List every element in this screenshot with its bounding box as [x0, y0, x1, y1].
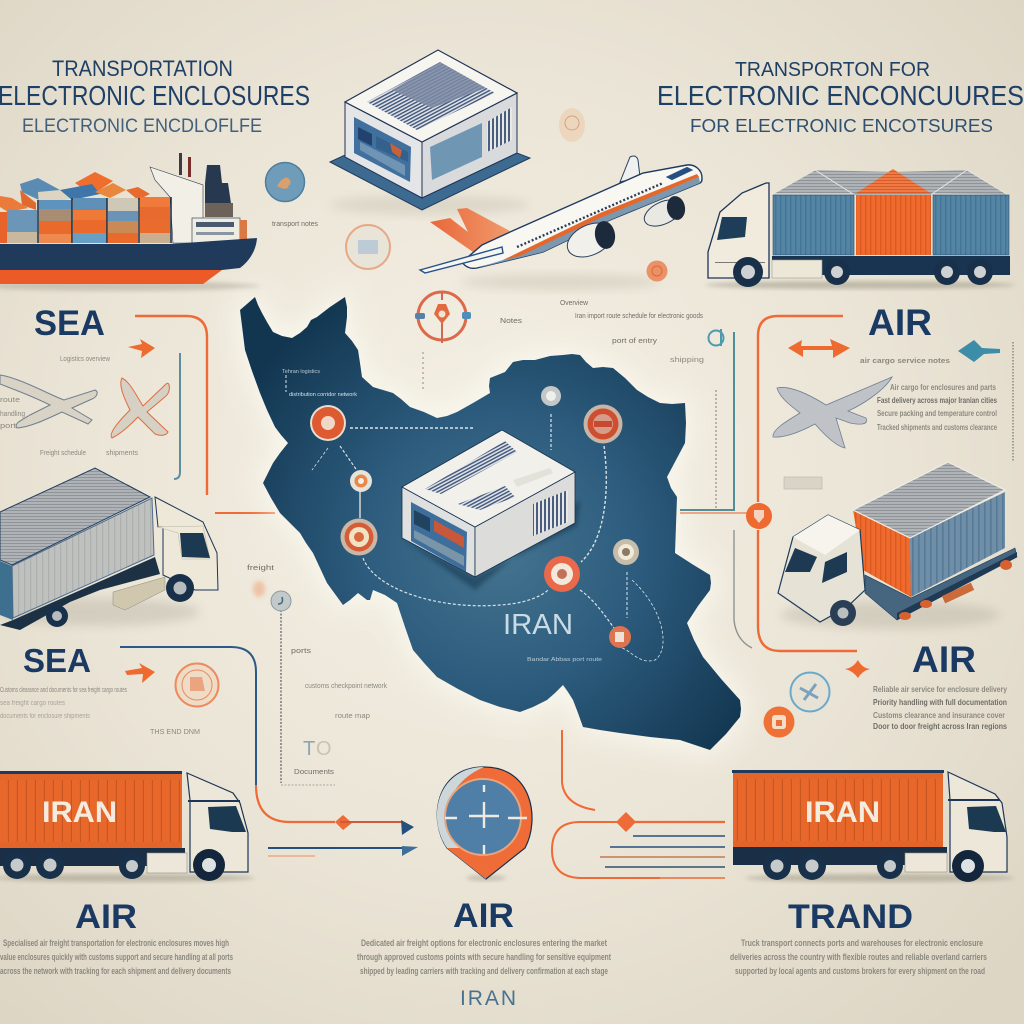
truck: left grey [0, 468, 218, 630]
wheel [763, 852, 791, 880]
Iran map [240, 297, 741, 750]
route lines right upper [680, 316, 1013, 651]
truck chassis [772, 256, 1010, 275]
plane tail fin [620, 156, 640, 182]
text block: centre [357, 938, 611, 976]
heading: air centre: AIR [453, 897, 514, 935]
trailer top [0, 468, 150, 565]
title block right: FOR ELECTRONIC ENCOTSURES [690, 116, 993, 136]
orange container [856, 195, 931, 255]
icon: faint building [784, 477, 822, 489]
text block: centre: Dedicated air freight options for electronic enclosures entering the market [361, 938, 607, 948]
box stripes [425, 441, 517, 494]
map shape [240, 297, 741, 750]
wheel [967, 259, 993, 285]
faint captions upper centre: Iran import route schedule for electronic goods [575, 313, 703, 320]
faint captions upper centre [500, 300, 704, 364]
dashed vertical faint [422, 352, 424, 392]
route lines centre right [552, 730, 725, 878]
heading: air upper right: AIR [868, 302, 932, 343]
faint captions upper centre: shipping [670, 357, 704, 364]
node [340, 518, 378, 556]
wheel [46, 605, 68, 627]
box top panel [367, 62, 495, 130]
cab [155, 497, 218, 590]
ship hull [0, 238, 257, 270]
wheel [952, 850, 984, 882]
icon: small grey pin [271, 591, 291, 611]
cab [778, 515, 865, 622]
text: air right lines [860, 358, 997, 432]
plane near wing [420, 247, 503, 273]
text: left faint: Customs clearance and documents for sea freight cargo routes [0, 687, 127, 694]
plane orange stabiliser [430, 208, 510, 252]
heading: sea 1: SEA [34, 304, 105, 343]
text block: bottom left: value enclosures quickly with customs support and secure handling at all ports [0, 952, 233, 962]
faint captions upper centre: port of entry [612, 338, 658, 345]
pin marker centre [437, 767, 532, 881]
truck cab [708, 183, 769, 278]
faint captions upper centre: Notes [500, 318, 523, 325]
wheel [934, 259, 960, 285]
faint caption top: transport notes [272, 221, 318, 228]
map labels small [282, 369, 602, 663]
container: IRAN [42, 796, 117, 829]
node [544, 556, 580, 592]
box screen [411, 502, 467, 572]
title block left: ELECTRONIC ENCDLOFLFE [22, 116, 262, 137]
text: air right lines: air cargo service notes [860, 358, 950, 365]
text: left faint 2 [0, 565, 387, 776]
text: left faint 2: O [316, 738, 332, 760]
icon: orange square [764, 706, 794, 738]
orange truck: bottom right [732, 770, 1015, 882]
blue container [773, 195, 854, 255]
trailer side [12, 498, 154, 618]
chassis [733, 847, 947, 865]
arrow: teal [958, 340, 1000, 362]
plane engine near [562, 216, 618, 264]
icon: blue ring [790, 672, 830, 712]
icon: small orange circle [646, 260, 668, 282]
text: left faint 2: route map [335, 713, 370, 720]
box left screen [354, 117, 411, 182]
icon: faint screen circle [346, 225, 390, 269]
truck: right isometric [778, 462, 1017, 629]
wheel [166, 574, 194, 602]
map labels small: distribution corridor network [289, 392, 357, 398]
ship superstructure [150, 153, 247, 243]
route: dashed network [286, 375, 663, 661]
truck tarp [113, 577, 165, 610]
wheel [830, 600, 856, 626]
wheel [798, 852, 826, 880]
wheel [3, 851, 31, 879]
truck: top right [705, 169, 1015, 289]
text: left upper faint lines: handling [0, 411, 25, 418]
heading: trand: TRAND [788, 898, 913, 936]
map label: IRAN: IRAN [503, 609, 573, 641]
icon: blue circle [266, 162, 304, 202]
text: left upper faint lines: Logistics overview [60, 356, 111, 363]
map labels small: Bandar Abbas port route [527, 657, 602, 663]
arrow: double orange [788, 339, 850, 358]
title block right: TRANSPORTON FOR [735, 59, 930, 81]
box stripes [458, 486, 515, 510]
title block left [0, 56, 310, 137]
icon: orange circle [176, 664, 218, 706]
blue container rear [933, 195, 1009, 255]
container [732, 770, 944, 847]
title block left: TRANSPORTATION [52, 56, 233, 81]
title block left: ELECTRONIC ENCLOSURES [0, 80, 310, 111]
node [310, 405, 346, 441]
text: left upper faint lines: route [0, 397, 20, 404]
wheel [733, 257, 763, 287]
trailer platform [865, 548, 1017, 620]
plane: x-shaped left [111, 378, 169, 438]
orange truck: bottom left [0, 771, 255, 882]
wheel [824, 259, 850, 285]
plane fuselage [462, 165, 702, 268]
airplane [420, 156, 702, 290]
truck underbody [0, 557, 160, 630]
truck roofs [773, 169, 1008, 195]
heading: air bottom left: AIR [75, 898, 137, 936]
faint captions upper centre: Overview [560, 300, 589, 307]
plane: grey right [773, 377, 892, 448]
heading: air lower right: AIR [912, 639, 976, 680]
box barcode [533, 490, 568, 536]
text: left faint 2: Documents [294, 769, 335, 776]
route lines left upper [128, 316, 275, 513]
box label [513, 468, 553, 487]
icon: orange marker on line [746, 503, 772, 529]
label: iran bottom: IRAN [460, 987, 516, 1010]
diamond [845, 660, 870, 678]
text: left upper faint lines: port [0, 423, 16, 430]
enclosure box top [330, 50, 530, 215]
text: left faint 2: THS END DNM [150, 729, 200, 736]
text block: centre: shipped by leading carriers with tracking and delivery confirmation at each stage [360, 966, 608, 976]
title block right [657, 59, 1024, 136]
text: left upper faint lines [0, 356, 138, 457]
text block: bottom left: across the network with tracking for each shipment and delivery documents [0, 966, 231, 976]
text block: bottom right [730, 938, 987, 976]
text: left faint 2: customs checkpoint network [305, 683, 387, 690]
pin crosshair [445, 785, 527, 854]
container ship [0, 153, 260, 291]
faint orange smudge [253, 581, 265, 597]
text: left faint 2: T [303, 738, 315, 760]
box barcode [487, 107, 512, 152]
text: left upper faint lines: shipments [106, 450, 138, 457]
node [609, 626, 631, 648]
text block: centre: through approved customs points with secure handling for sensitive equipment [357, 952, 611, 962]
text: left faint 2: documents for enclosure shipments [0, 713, 90, 720]
wheel [36, 851, 64, 879]
node [350, 470, 372, 492]
cab [187, 773, 248, 872]
container blue side [910, 492, 1005, 597]
node [613, 539, 639, 565]
container top [853, 462, 1005, 538]
enclosure box centre [402, 430, 580, 590]
node [541, 386, 561, 406]
ship containers [0, 172, 171, 243]
faint icon: top middle [559, 108, 585, 142]
node [584, 404, 622, 444]
text block: bottom left [0, 938, 233, 976]
map labels small: Tehran logistics [282, 369, 320, 375]
container [0, 771, 182, 848]
icon: target top centre [415, 291, 471, 343]
text block: bottom left: Specialised air freight transportation for electronic enclosures moves high [3, 938, 229, 948]
route lines left lower [120, 610, 418, 856]
container orange face [853, 510, 911, 597]
text: left faint 2: freight [247, 565, 274, 572]
chassis [0, 848, 185, 866]
platform lights [899, 560, 1012, 620]
box right screen [430, 123, 482, 180]
heading: sea 2: SEA [23, 642, 91, 679]
cab [948, 772, 1007, 872]
wheel [877, 853, 903, 879]
plane: grey left [0, 375, 97, 428]
plane engine far [640, 195, 687, 231]
text: left upper faint lines: Freight schedule [40, 450, 86, 457]
icon: teal ring [708, 329, 724, 346]
text: left faint 2: sea freight cargo routes [0, 700, 65, 707]
trailer end [0, 561, 13, 620]
container: IRAN [805, 796, 880, 829]
wheel [119, 853, 145, 879]
map glow [240, 297, 740, 750]
text block: air lower right [873, 684, 1007, 731]
wheel [193, 849, 225, 881]
text: left faint 2: ports [291, 648, 312, 655]
